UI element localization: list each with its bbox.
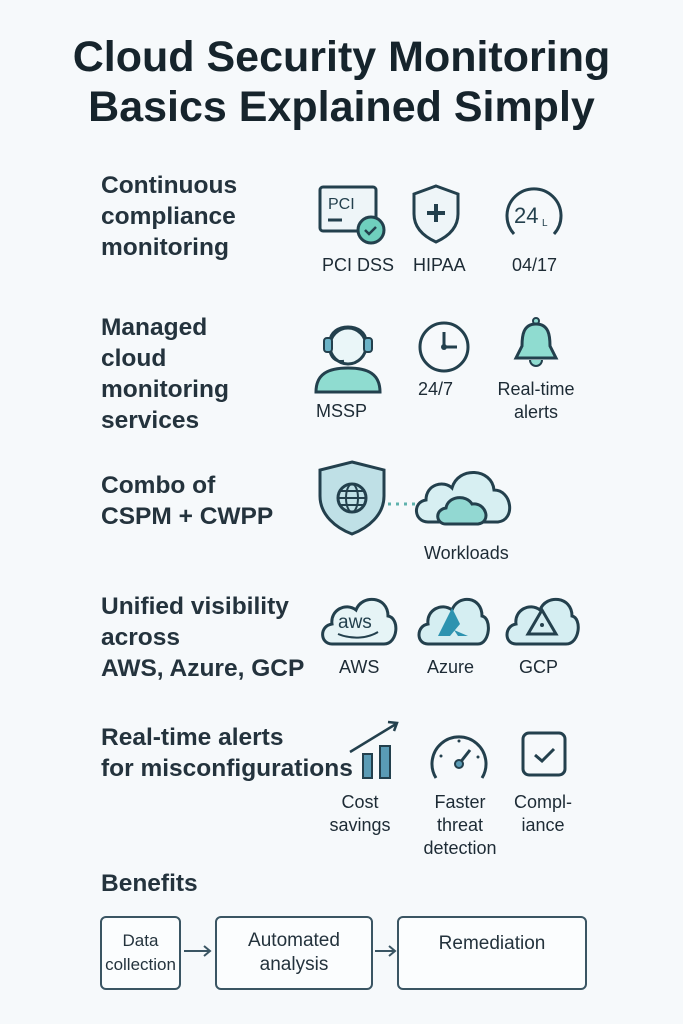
text: alerts [514, 402, 558, 422]
captions row 1: HIPAA [413, 255, 466, 275]
text: Faster [434, 792, 486, 812]
text: combo: CSPM + CWPP [101, 503, 273, 530]
text: 24/7 [418, 379, 453, 399]
title: Cloud Security Monitoring [73, 33, 610, 81]
flow: automated analysis [215, 916, 373, 990]
arrow [375, 945, 396, 957]
flow: remediation [397, 916, 587, 990]
icon: clock [418, 322, 470, 372]
icon: 24 clock: L [542, 218, 548, 229]
captions row 5 [329, 792, 391, 835]
text: Real-time [497, 379, 575, 399]
text: managed: cloud [101, 345, 166, 372]
text: managed: services [101, 407, 199, 434]
flow: automated analysis: analysis [260, 954, 328, 975]
text: realtime alerts: Real-time alerts [101, 724, 283, 751]
icon: PCI: PCI [328, 196, 355, 213]
text: Compl- [514, 792, 572, 812]
title [73, 33, 610, 131]
text: continuous compliance: compliance [101, 203, 236, 230]
captions row 5: Cost [341, 792, 378, 812]
flow: data collection: Data [123, 931, 158, 950]
text: detection [423, 838, 497, 858]
text: continuous compliance [101, 172, 237, 261]
text: managed [101, 314, 229, 434]
text: threat [437, 815, 483, 835]
text: combo: Combo of [101, 472, 215, 499]
icon: 24 clock: 24 [514, 203, 538, 228]
captions row 2: MSSP [316, 401, 367, 421]
text: unified: AWS, Azure, GCP [101, 655, 304, 682]
heading: benefits: Benefits [101, 870, 198, 897]
text: realtime alerts [101, 724, 353, 782]
captions row 1: 04/17 [512, 255, 557, 275]
text: unified [101, 593, 304, 682]
flow: remediation: Remediation [439, 933, 545, 954]
text: iance [521, 815, 565, 835]
text: unified: Unified visibility [101, 593, 289, 620]
icon: aws cloud [321, 598, 398, 646]
flow: data collection: collection [105, 955, 176, 974]
text: managed: monitoring [101, 376, 229, 403]
icon: azure cloud [418, 598, 490, 646]
icon: bell [514, 317, 558, 367]
icon: aws cloud: aws [338, 612, 372, 633]
icon: bar chart [349, 720, 399, 779]
icon: checkbox [522, 732, 566, 776]
icon: 24 clock [506, 187, 562, 235]
icon: headset person [314, 326, 382, 394]
arrow [184, 945, 212, 957]
text: managed: Managed [101, 314, 207, 341]
text: continuous compliance: monitoring [101, 234, 229, 261]
text: combo [101, 472, 273, 530]
flow: data collection [100, 916, 181, 990]
text: GCP [519, 657, 558, 677]
captions row 1 [322, 255, 557, 275]
icon: gcp cloud [506, 598, 580, 646]
icon: HIPAA shield [412, 184, 460, 244]
icon: PCI [318, 186, 386, 244]
captions row 4: AWS [339, 657, 379, 677]
flow: automated analysis: Automated [248, 930, 340, 951]
text: continuous compliance: Continuous [101, 172, 237, 199]
text: realtime alerts: for misconfigurations [101, 755, 353, 782]
captions row 1: PCI DSS [322, 255, 394, 275]
text: unified: across [101, 624, 180, 651]
icon: shield globe with cloud [318, 460, 512, 536]
captions row 5: savings [329, 815, 391, 835]
icon: gauge [430, 735, 488, 779]
caption: workloads: Workloads [424, 543, 509, 563]
title: Basics Explained Simply [88, 83, 595, 131]
text: Azure [427, 657, 474, 677]
